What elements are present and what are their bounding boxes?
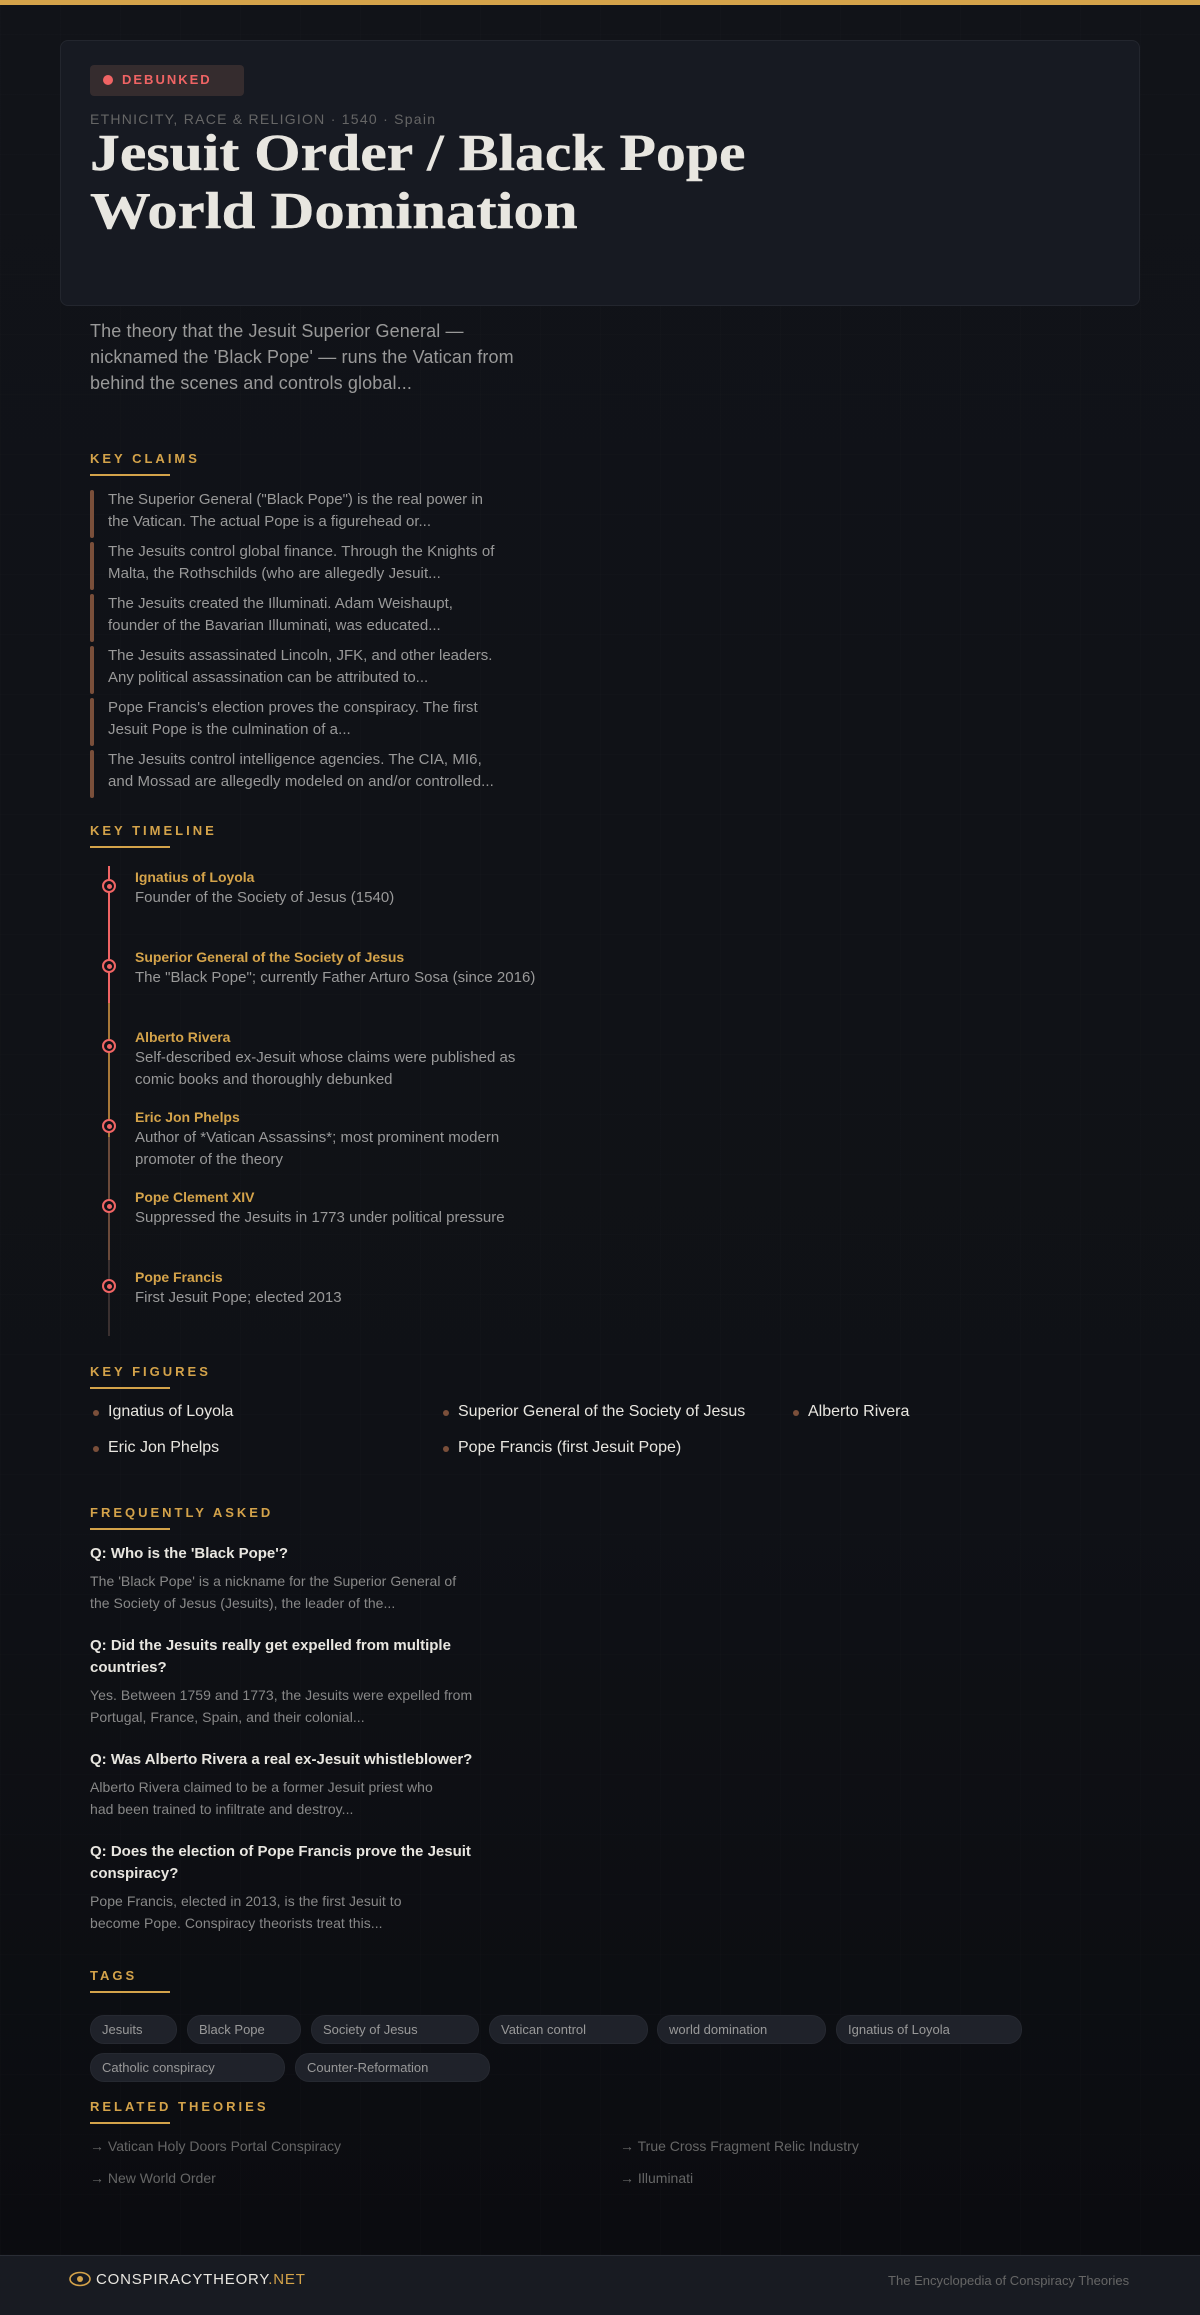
claim 1: the Vatican. The actual Pope is a figurehead or... xyxy=(108,513,431,530)
claim 3: The Jesuits created the Illuminati. Adam Weishaupt, xyxy=(108,595,453,612)
claim 2: Malta, the Rothschilds (who are allegedly Jesuit... xyxy=(108,565,441,582)
tag: Catholic conspiracy xyxy=(90,2053,285,2082)
heading: tags: TAGS xyxy=(90,1968,137,1983)
event: Pope Francis: First Jesuit Pope; elected 2013 xyxy=(135,1289,342,1306)
tag: Ignatius of Loyola: Ignatius of Loyola xyxy=(848,2022,950,2037)
intro text: nicknamed the 'Black Pope' — runs the Vatican from xyxy=(90,347,514,367)
claim 2 xyxy=(90,542,495,590)
timeline node 3 xyxy=(102,1039,116,1053)
event: Eric Jon Phelps: promoter of the theory xyxy=(135,1151,283,1168)
badge label: DEBUNKED xyxy=(122,72,212,87)
tag: Black Pope xyxy=(187,2015,301,2044)
footer tagline: The Encyclopedia of Conspiracy Theories xyxy=(888,2273,1129,2288)
tag: Counter-Reformation xyxy=(295,2053,490,2082)
event: Ignatius of Loyola: Founder of the Society of Jesus (1540) xyxy=(135,889,394,906)
figure: Superior General: Superior General of the Society of Jesus xyxy=(458,1403,745,1420)
tag: Black Pope: Black Pope xyxy=(199,2022,265,2037)
answer 4: Pope Francis, elected in 2013, is the first Jesuit to xyxy=(90,1893,402,1909)
claim 5: Jesuit Pope is the culmination of a... xyxy=(108,721,351,738)
figure: Eric Jon Phelps: Eric Jon Phelps xyxy=(108,1439,219,1456)
top accent bar xyxy=(0,0,1200,5)
heading: key timeline: KEY TIMELINE xyxy=(90,823,217,838)
tag: Jesuits: Jesuits xyxy=(102,2022,142,2037)
tag: world domination: world domination xyxy=(669,2022,767,2037)
event: Eric Jon Phelps: Author of *Vatican Assassins*; most prominent modern xyxy=(135,1129,499,1146)
claim 3 xyxy=(90,594,453,642)
question 4: conspiracy? xyxy=(90,1865,178,1882)
timeline node 4 xyxy=(102,1119,116,1133)
answer 2 xyxy=(90,1687,472,1725)
question 3: Q: Was Alberto Rivera a real ex-Jesuit whistleblower? xyxy=(90,1751,472,1768)
claim 1: The Superior General ("Black Pope") is the real power in xyxy=(108,491,483,508)
intro text: The theory that the Jesuit Superior General — xyxy=(90,321,464,341)
tag: Society of Jesus: Society of Jesus xyxy=(323,2022,418,2037)
timeline axis xyxy=(108,866,110,1336)
claim 1 xyxy=(90,490,483,538)
answer 4: become Pope. Conspiracy theorists treat this... xyxy=(90,1915,383,1931)
event: Pope Clement XIV: Suppressed the Jesuits in 1773 under political pressure xyxy=(135,1209,505,1226)
timeline node 6 xyxy=(102,1279,116,1293)
title: Jesuit Order / Black Pope xyxy=(90,125,746,182)
claim 3: founder of the Bavarian Illuminati, was educated... xyxy=(108,617,441,634)
question 2: Q: Did the Jesuits really get expelled from multiple xyxy=(90,1637,451,1654)
event: Alberto Rivera xyxy=(135,1029,515,1088)
title xyxy=(90,125,746,240)
claim 5: Pope Francis's election proves the conspiracy. The first xyxy=(108,699,478,716)
timeline chart xyxy=(108,866,110,1336)
event: Superior General xyxy=(135,949,535,986)
event: Pope Clement XIV: Pope Clement XIV xyxy=(135,1189,254,1205)
intro text: behind the scenes and controls global... xyxy=(90,373,412,393)
question 2: countries? xyxy=(90,1659,167,1676)
icon: eye logo xyxy=(69,2272,91,2286)
heading: key figures: KEY FIGURES xyxy=(90,1364,211,1379)
related link: Illuminati: → Illuminati xyxy=(620,2170,693,2186)
answer 1: The 'Black Pope' is a nickname for the Superior General of xyxy=(90,1573,456,1589)
heading: frequently asked: FREQUENTLY ASKED xyxy=(90,1505,273,1520)
event: Pope Clement XIV xyxy=(135,1189,505,1226)
icon: status dot xyxy=(103,75,113,85)
tag: Society of Jesus xyxy=(311,2015,479,2044)
footer logo text: CONSPIRACYTHEORY.NET xyxy=(96,2271,306,2288)
answer 3: had been trained to infiltrate and destroy... xyxy=(90,1801,354,1817)
tag: world domination xyxy=(657,2015,826,2044)
related link: Vatican Holy Doors: → Vatican Holy Doors Portal Conspiracy xyxy=(90,2138,341,2154)
question 1: Q: Who is the 'Black Pope'? xyxy=(90,1545,288,1562)
related link: New World Order: → New World Order xyxy=(90,2170,216,2186)
answer 3: Alberto Rivera claimed to be a former Jesuit priest who xyxy=(90,1779,433,1795)
claim 4 xyxy=(90,646,492,694)
claim 6: The Jesuits control intelligence agencies. The CIA, MI6, xyxy=(108,751,482,768)
status badge: debunked xyxy=(90,65,244,96)
event: Superior General: Superior General of the Society of Jesus xyxy=(135,949,404,965)
event: Alberto Rivera: comic books and thoroughly debunked xyxy=(135,1071,393,1088)
figure: Ignatius of Loyola: Ignatius of Loyola xyxy=(108,1403,233,1420)
question 2 xyxy=(90,1637,451,1676)
heading: related theories: RELATED THEORIES xyxy=(90,2099,268,2114)
timeline node 2 xyxy=(102,959,116,973)
title: World Domination xyxy=(90,183,578,240)
tag: Vatican control: Vatican control xyxy=(501,2022,586,2037)
tag: Jesuits xyxy=(90,2015,177,2044)
figure: Pope Francis: Pope Francis (first Jesuit Pope) xyxy=(458,1439,681,1456)
claim 4: Any political assassination can be attributed to... xyxy=(108,669,428,686)
tag: Vatican control xyxy=(489,2015,648,2044)
answer 2: Yes. Between 1759 and 1773, the Jesuits were expelled from xyxy=(90,1687,472,1703)
panel: hero card xyxy=(60,40,1140,306)
claim 6: and Mossad are allegedly modeled on and/or controlled... xyxy=(108,773,494,790)
answer 2: Portugal, France, Spain, and their colonial... xyxy=(90,1709,365,1725)
claim 4: The Jesuits assassinated Lincoln, JFK, and other leaders. xyxy=(108,647,492,664)
heading: key claims: KEY CLAIMS xyxy=(90,451,200,466)
event: Alberto Rivera: Alberto Rivera xyxy=(135,1029,230,1045)
event: Pope Francis: Pope Francis xyxy=(135,1269,223,1285)
timeline node 1 xyxy=(102,879,116,893)
category and date line: ETHNICITY, RACE & RELIGION · 1540 · Spain xyxy=(90,111,436,127)
answer 3 xyxy=(90,1779,433,1817)
claim 2: The Jesuits control global finance. Through the Knights of xyxy=(108,543,495,560)
footer bar xyxy=(0,2255,1200,2315)
event: Pope Francis xyxy=(135,1269,342,1306)
intro text xyxy=(90,321,514,393)
event: Ignatius of Loyola xyxy=(135,869,394,906)
timeline node 5 xyxy=(102,1199,116,1213)
tag: Catholic conspiracy: Catholic conspiracy xyxy=(102,2060,215,2075)
event: Alberto Rivera: Self-described ex-Jesuit whose claims were published as xyxy=(135,1049,515,1066)
figure: Alberto Rivera: Alberto Rivera xyxy=(808,1403,909,1420)
related link: True Cross: → True Cross Fragment Relic Industry xyxy=(620,2138,859,2154)
claim 5 xyxy=(90,698,478,746)
question 4: Q: Does the election of Pope Francis prove the Jesuit xyxy=(90,1843,471,1860)
answer 4 xyxy=(90,1893,402,1931)
claim 6 xyxy=(90,750,494,798)
event: Ignatius of Loyola: Ignatius of Loyola xyxy=(135,869,254,885)
tag: Ignatius of Loyola xyxy=(836,2015,1022,2044)
event: Eric Jon Phelps xyxy=(135,1109,499,1168)
event: Eric Jon Phelps: Eric Jon Phelps xyxy=(135,1109,240,1125)
tag: Counter-Reformation: Counter-Reformation xyxy=(307,2060,428,2075)
answer 1 xyxy=(90,1573,456,1611)
answer 1: the Society of Jesus (Jesuits), the leader of the... xyxy=(90,1595,395,1611)
question 4 xyxy=(90,1843,471,1882)
event: Superior General: The "Black Pope"; currently Father Arturo Sosa (since 2016) xyxy=(135,969,535,986)
